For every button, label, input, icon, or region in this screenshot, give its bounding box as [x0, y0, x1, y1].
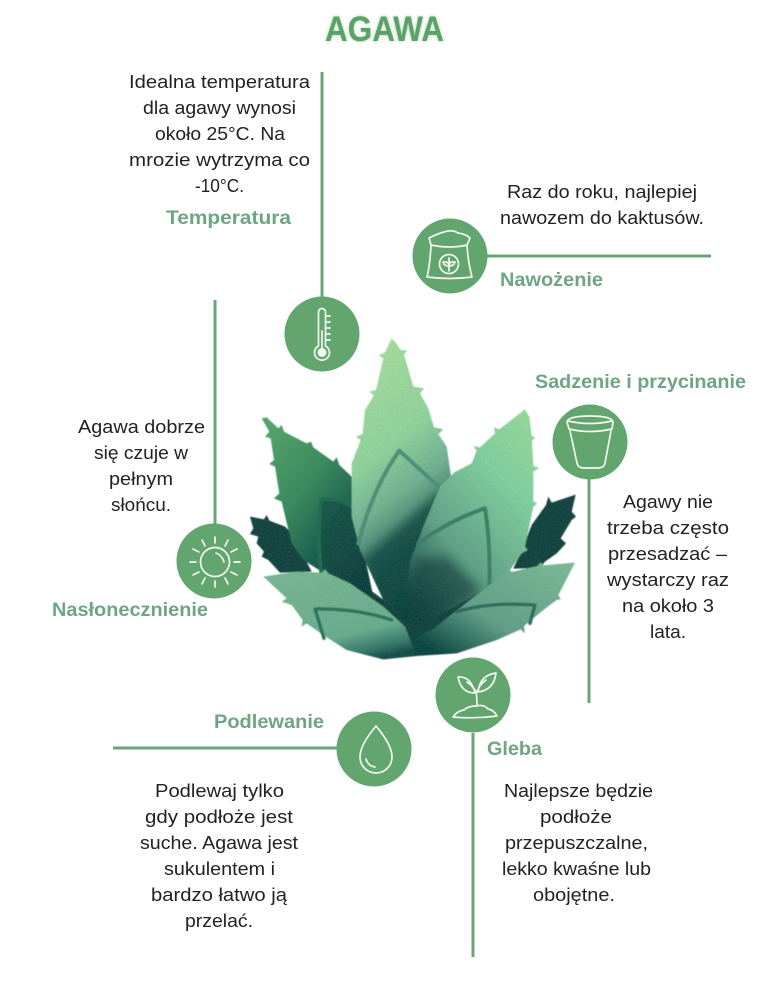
temperature text: Idealna temperatura: [129, 71, 311, 92]
temperature text: około 25°C. Na: [155, 123, 286, 144]
fertilizer line: [486, 254, 711, 258]
watering text: Podlewaj tylko: [155, 780, 284, 801]
panel: gleba: [436, 658, 653, 957]
planting text: [606, 491, 729, 642]
panel: sadzenie i przycinanie: [535, 372, 746, 703]
soil text: [502, 780, 653, 905]
soil text: Najlepsze będzie: [504, 780, 653, 801]
right leaf: [402, 409, 539, 627]
temperature line: [320, 72, 324, 300]
soil line: [472, 733, 474, 957]
fertilizer heading: Nawożenie: [500, 270, 603, 291]
panel: podlewanie: [113, 712, 412, 931]
back dark leaf right: [513, 495, 576, 569]
title: AGAWA: [325, 10, 444, 49]
watering text: gdy podłoże jest: [145, 806, 293, 827]
planting text: Agawy nie: [623, 491, 713, 512]
watering heading: Podlewanie: [214, 712, 324, 733]
planting heading: Sadzenie i przycinanie: [535, 372, 746, 393]
watering line: [113, 746, 338, 750]
fertilizer text: [500, 181, 704, 228]
fertilizer text: Raz do roku, najlepiej: [507, 181, 697, 202]
watering text: bardzo łatwo ją: [151, 884, 288, 905]
soil text: obojętne.: [533, 884, 615, 905]
icon: water drop: [336, 712, 412, 786]
icon: thermometer: [284, 296, 360, 372]
left leaf: [262, 417, 373, 597]
fertilizer text: nawozem do kaktusów.: [500, 207, 704, 228]
panel: temperatura: [129, 71, 360, 372]
icon: flower pot: [552, 404, 628, 480]
watering text: sukulentem i: [164, 858, 275, 879]
planting text: wystarczy raz: [606, 569, 729, 590]
icon: fertilizer bag: [412, 218, 488, 294]
sun text: Agawa dobrze: [78, 416, 205, 437]
watering text: [140, 780, 298, 931]
center leaf: [352, 338, 451, 623]
soil text: lekko kwaśne lub: [502, 858, 651, 879]
soil text: podłoże: [540, 806, 612, 827]
planting line: [588, 478, 590, 703]
sun text: [78, 416, 205, 515]
icon: sun: [176, 524, 252, 598]
back dark leaf left: [250, 515, 312, 573]
sun text: pełnym: [109, 468, 173, 489]
planting text: przesadzać –: [608, 543, 728, 564]
sun text: słońcu.: [111, 494, 171, 515]
temperature heading: Temperatura: [166, 208, 291, 229]
temperature text: dla agawy wynosi: [143, 97, 296, 118]
sun line: [214, 300, 216, 526]
bottom left leaf: [263, 569, 417, 659]
illustration: agave plant: [250, 338, 576, 659]
soil text: przepuszczalne,: [505, 832, 648, 853]
planting text: na około 3: [622, 595, 714, 616]
title: AGAWA: [325, 10, 444, 49]
soil heading: Gleba: [487, 739, 542, 760]
planting text: lata.: [650, 621, 686, 642]
temperature text: [129, 71, 311, 196]
temperature text: mrozie wytrzyma co: [129, 149, 310, 170]
panel: nasłonecznienie: [52, 300, 252, 621]
planting text: trzeba często: [607, 517, 729, 538]
dark plant base: [320, 570, 503, 658]
sun heading: Nasłonecznienie: [52, 600, 208, 621]
watering text: przelać.: [185, 910, 253, 931]
icon: seedling: [436, 658, 510, 732]
watering text: suche. Agawa jest: [140, 832, 298, 853]
sun text: się czuje w: [94, 442, 189, 463]
temperature text: -10°C.: [195, 175, 244, 196]
bottom right leaf: [413, 562, 575, 656]
panel: nawożenie: [412, 181, 711, 294]
